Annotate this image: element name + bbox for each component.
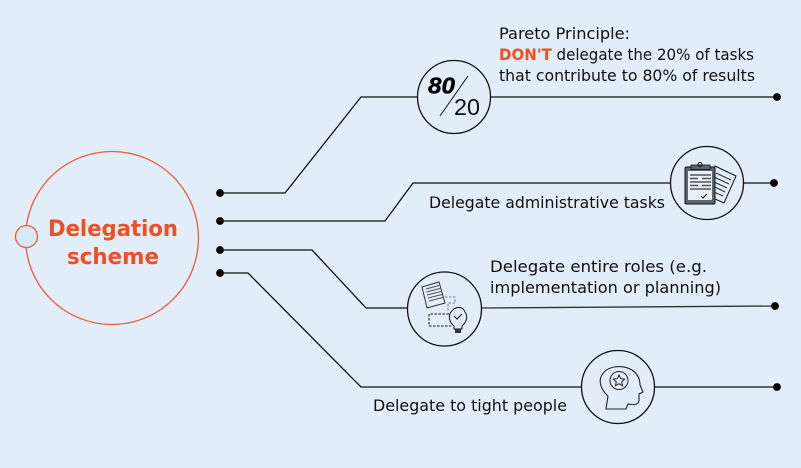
icon: 80/20 [418, 60, 490, 134]
central circle: Delegation scheme: Delegation [48, 216, 178, 242]
icon: 80/20: 80 [428, 72, 455, 98]
text: Delegate entire roles [490, 257, 721, 297]
text: Delegate entire roles: implementation or planning) [490, 278, 721, 297]
icon: clipboard and document [670, 146, 744, 220]
central circle: Delegation scheme: scheme [67, 244, 159, 270]
text: Delegate administrative tasks: Delegate administrative tasks [429, 193, 665, 212]
icon: 80/20: 20 [454, 94, 480, 120]
central circle: Delegation scheme [16, 152, 198, 324]
text: Pareto Principle: Pareto Principle: [499, 24, 630, 43]
connector: roles branch [216, 246, 779, 310]
text: Pareto Principle [499, 24, 755, 85]
text: Pareto Principle: DON'T delegate the 20% of tasks [499, 45, 754, 64]
connector: administrative branch [216, 179, 778, 225]
text: Delegate entire roles: Delegate entire roles (e.g. [490, 257, 707, 276]
text: Delegate to tight people: Delegate to tight people [373, 396, 567, 415]
icon: head with star [582, 350, 654, 424]
icon: document and light bulb [408, 272, 482, 346]
connector: Pareto branch [216, 93, 781, 197]
connector: people branch [216, 269, 781, 391]
text: Pareto Principle: that contribute to 80% of results [499, 66, 755, 85]
